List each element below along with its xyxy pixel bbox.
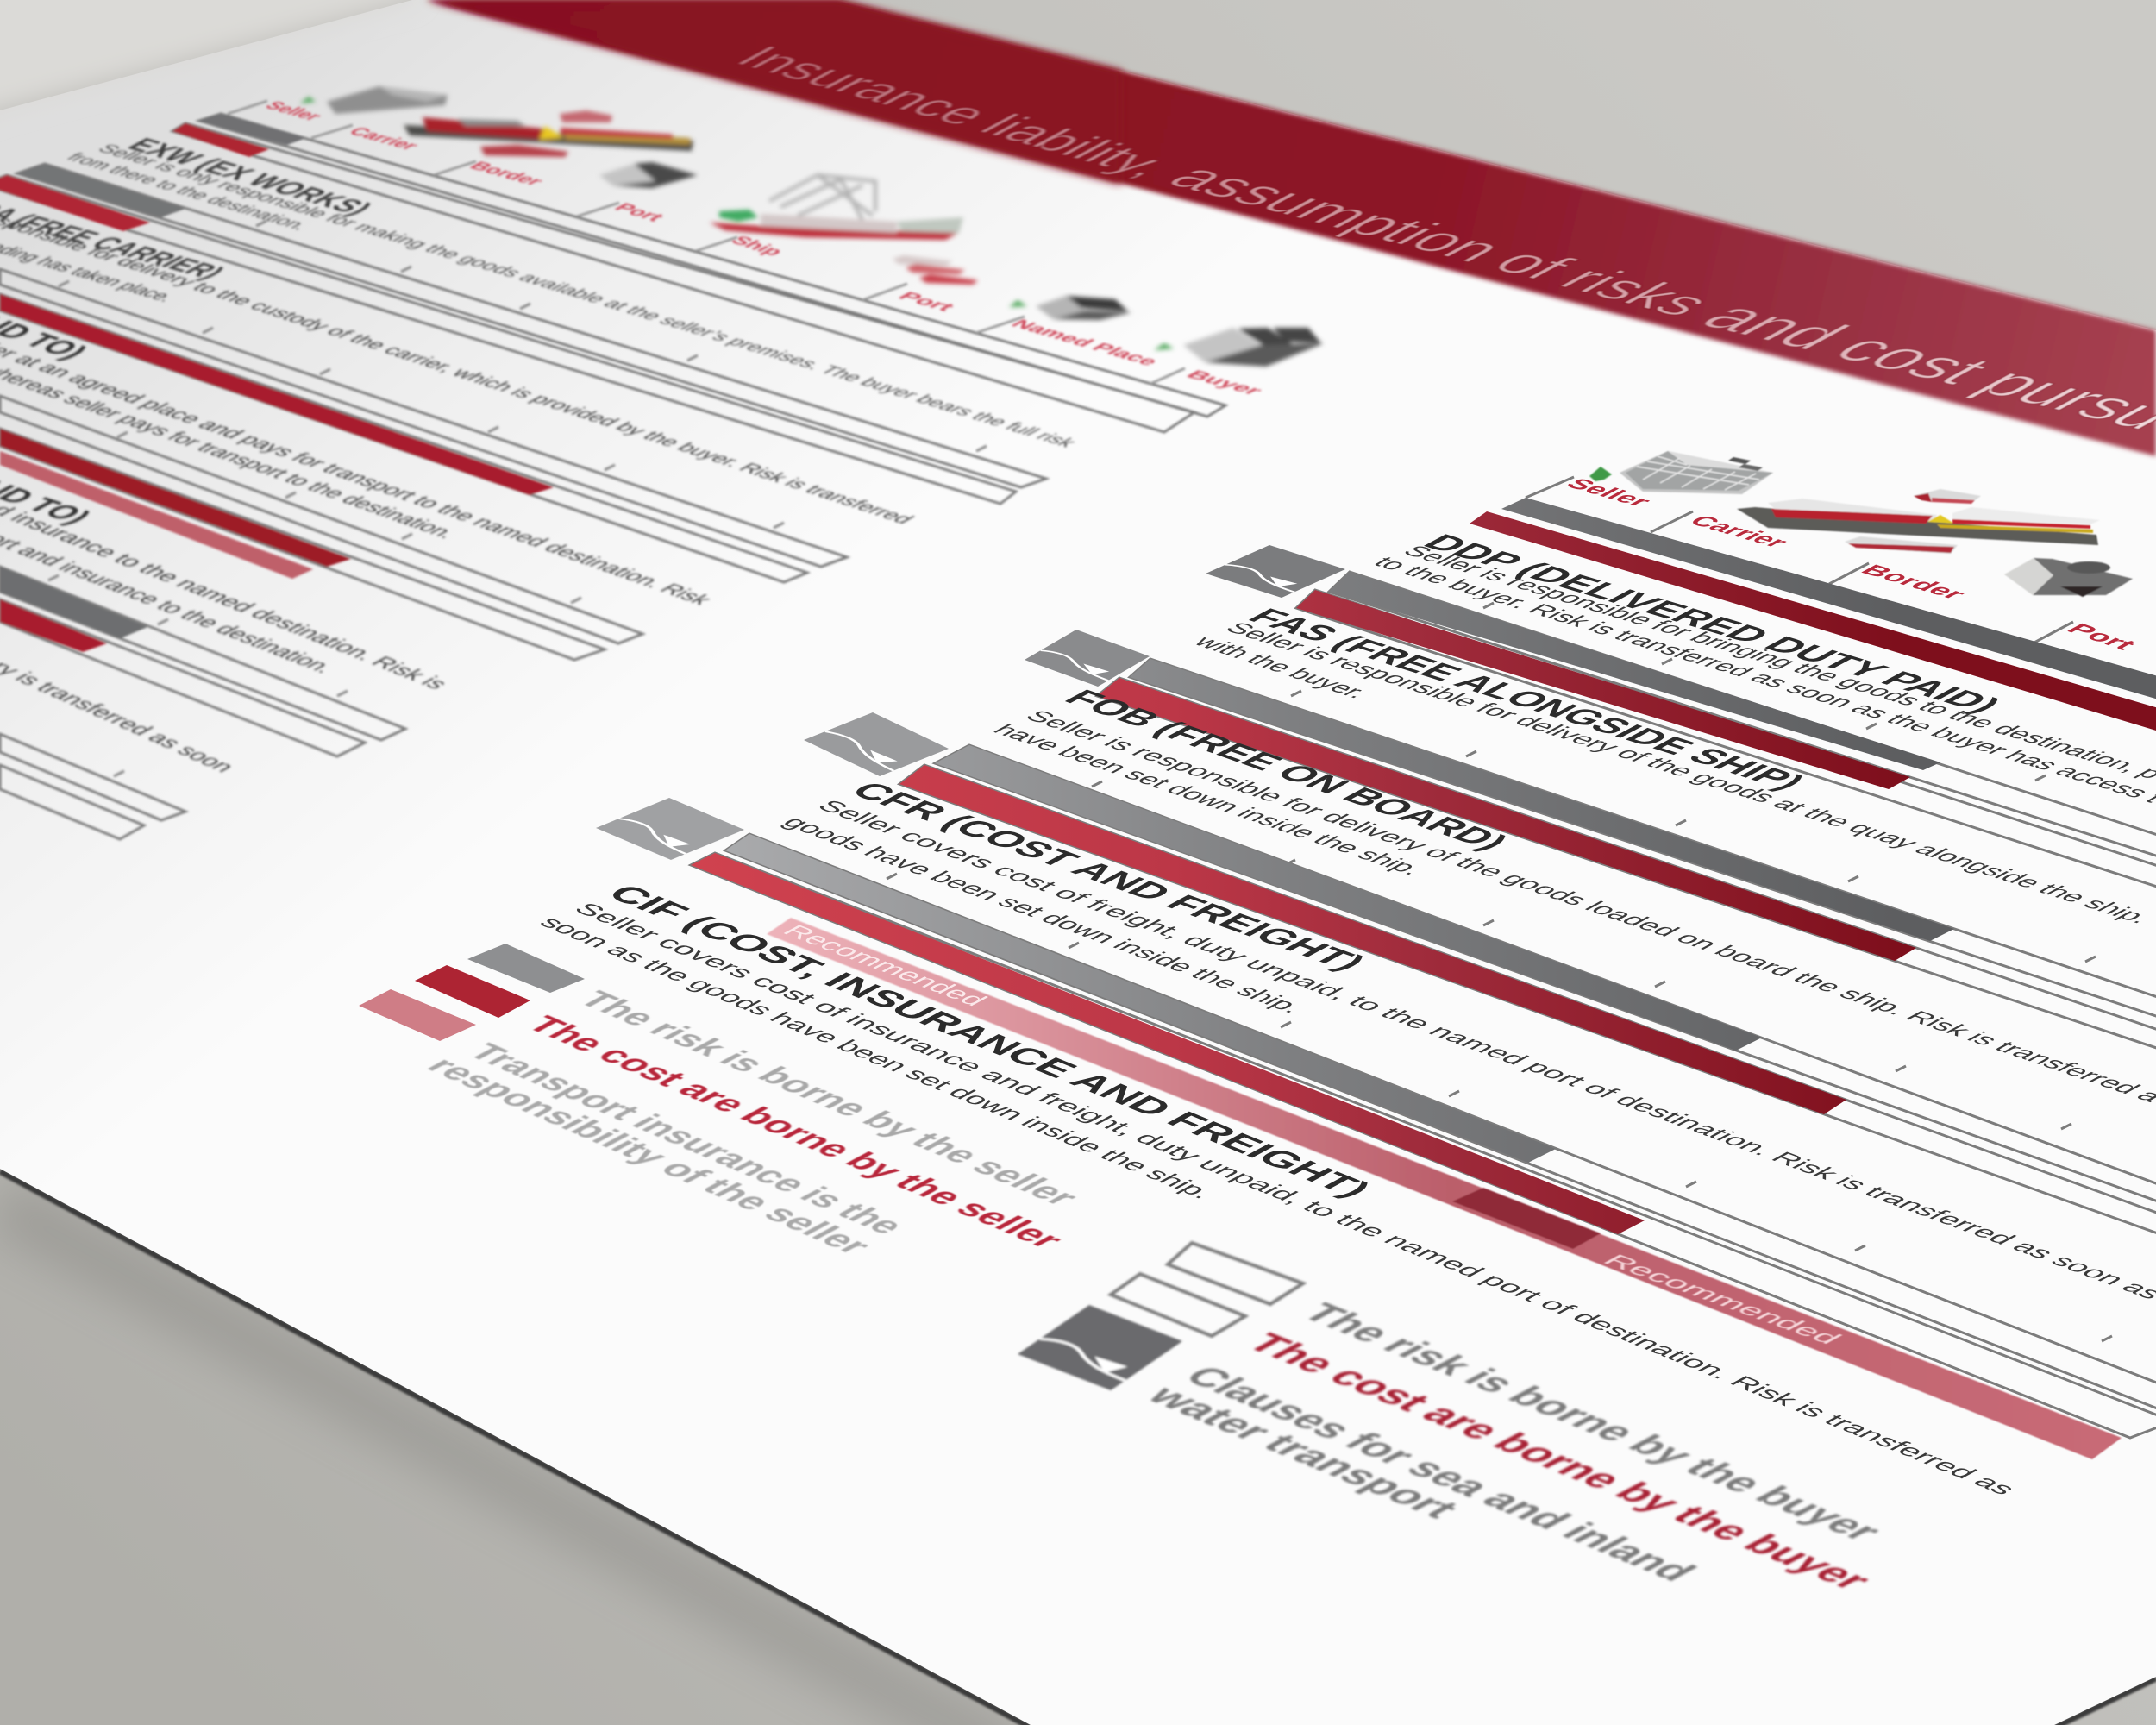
- swatch: insurance: [359, 989, 476, 1041]
- swatch: cost outline: [1111, 1274, 1245, 1336]
- icon: seller building: [1620, 451, 1773, 494]
- legend text: insurance: Transport insurance is the: [460, 1038, 914, 1239]
- label: border: Border: [1855, 561, 1973, 602]
- label: named place: Named Place: [1006, 317, 1164, 367]
- FOB text: have been set down inside the ship.: [987, 721, 1430, 878]
- panel: right stage icons: [1589, 451, 2133, 597]
- band shape: [426, 0, 2156, 456]
- stage labels, left table: [260, 99, 1269, 397]
- label: port: Port: [2061, 620, 2142, 653]
- FOB bars: [1097, 659, 1954, 961]
- DDP icon: sea transport: [1206, 545, 1345, 598]
- FAS bars: [1296, 572, 1940, 789]
- icon: lower truck: [480, 145, 568, 157]
- row outlines: [691, 572, 2156, 1438]
- label: seller: Seller: [1560, 475, 1658, 510]
- row tick marks: [887, 603, 2112, 1341]
- legend text: cost: The cost are borne by the seller: [518, 1011, 1073, 1252]
- legend: buyer: [1018, 1243, 1892, 1595]
- icon: green arrow: [1589, 467, 1612, 481]
- recommended insurance bar: [767, 918, 2122, 1459]
- icon: top truck: [560, 110, 612, 122]
- FOB title: FOB (FREE ON BOARD): [1056, 685, 1519, 855]
- stage divider ticks: [1526, 477, 2073, 644]
- icon: named place building: [1036, 296, 1132, 320]
- label: seller: Seller: [260, 99, 328, 122]
- header band: [426, 0, 2156, 456]
- DDP row: [1206, 498, 2156, 806]
- DDP title: DDP (DELIVERED DUTY PAID): [1414, 530, 2011, 717]
- swatch: cost: [415, 965, 530, 1018]
- legend text: insurance: responsibility of the seller: [418, 1052, 881, 1258]
- CPT bar: [0, 294, 554, 495]
- icon: sea transport clause: [1018, 1305, 1182, 1390]
- DDP text: to the buyer. Risk is transferred as soon as the buyer has access t: [1367, 554, 2156, 806]
- legend text: risk: The risk is borne by the seller: [570, 986, 1088, 1210]
- band far end, out of focus: [426, 0, 1121, 185]
- CIF bars: [691, 834, 1645, 1234]
- row tick marks: [48, 221, 987, 776]
- CFR icon: sea transport: [596, 798, 744, 860]
- title part 2: assumption of risks: [1152, 157, 1729, 323]
- swatch: risk: [467, 944, 585, 993]
- EXW text: from there to the destination.: [62, 150, 315, 232]
- icon: port building: [2004, 558, 2133, 597]
- FAS row: [1025, 572, 2156, 926]
- EXW title: EXW (EX WORKS): [120, 134, 381, 219]
- FCA bars: [0, 164, 185, 231]
- CFR text: Seller covers cost of freight, duty unpaid, to the named port of destination. Risk is transferred as soon as: [811, 797, 2156, 1302]
- label: ship: Ship: [726, 234, 789, 258]
- legend text: cost: The cost are borne by the buyer: [1236, 1328, 1882, 1595]
- paper soft shadow: [0, 1203, 1018, 1725]
- label: port: Port: [610, 201, 670, 223]
- CIF row: [533, 834, 2122, 1498]
- paper edge shadow: [0, 1171, 2156, 1725]
- CIF title: CIF (COST, INSURANCE AND FREIGHT): [599, 880, 1381, 1201]
- CFR row: [596, 745, 2156, 1302]
- FAS icon: sea transport: [1025, 630, 1150, 687]
- CIF text: soon as the goods have been set down inside the ship.: [533, 913, 1220, 1202]
- label: carrier: Carrier: [1683, 512, 1795, 550]
- label: border: Border: [465, 160, 549, 188]
- EXW text: Seller is only responsible for making the goods available at the seller’s premises. The buyer bears the full risk: [93, 141, 1082, 449]
- icon: crane: [769, 175, 875, 220]
- CIF text: [533, 900, 2021, 1498]
- fifth row bars: [0, 567, 147, 652]
- icon: port building: [599, 162, 698, 188]
- panel: left table (seller-side rules, out of focus): [0, 101, 1225, 839]
- legend text: clauses: Clauses for sea and inland: [1174, 1361, 1706, 1586]
- icon: container stacks: [893, 255, 978, 285]
- icon: buyer building: [1183, 328, 1324, 367]
- DDP text: Seller is responsible for bringing the goods to the destination, p: [1396, 543, 2156, 782]
- panel: left stage icons (out of focus): [300, 86, 1324, 367]
- row outlines: [0, 114, 1225, 839]
- FOB icon: sea transport: [804, 712, 949, 776]
- title part 1: Insurance liability,: [723, 40, 1186, 183]
- FOB text: Seller is responsible for delivery of the goods loaded on board the ship. Risk is transferred a: [1018, 707, 2156, 1106]
- EXW bars: [172, 114, 306, 157]
- recommended label left: Recommended: [776, 922, 993, 1009]
- CFR bars: [899, 745, 1846, 1114]
- icon: seller building: [327, 86, 448, 114]
- legend text: risk: The risk is borne by the buyer: [1291, 1298, 1892, 1546]
- DDP bars: [1470, 498, 2156, 736]
- FAS text: with the buyer.: [1187, 633, 1375, 701]
- CIP bars: [0, 429, 351, 579]
- FOB row: [804, 659, 2156, 1106]
- stage divider ticks: [228, 101, 1185, 384]
- icon: train: [404, 117, 693, 151]
- legend: seller: [359, 944, 1088, 1258]
- title: [723, 40, 2156, 437]
- icon: ship: [710, 210, 963, 240]
- CFR text: [776, 797, 2156, 1302]
- panel: right table (maritime rules): [533, 477, 2156, 1498]
- top-left background highlight: [0, 0, 431, 129]
- swatch: risk outline: [1168, 1243, 1303, 1304]
- recommended label right: Recommended: [1596, 1251, 1848, 1347]
- stage labels, right table: [1560, 475, 2142, 653]
- legend text: clauses: water transport: [1136, 1381, 1469, 1523]
- icon: lower truck: [1845, 536, 1958, 554]
- label: port 2: Port: [893, 290, 961, 314]
- CFR title: CFR (COST AND FREIGHT): [842, 777, 1376, 975]
- CFR text: goods have been set down inside the ship.: [776, 813, 1310, 1017]
- CIF text: Seller covers cost of insurance and freight, duty unpaid, to the named port of destination. Risk is transferred as: [567, 900, 2021, 1498]
- label: buyer: Buyer: [1181, 368, 1269, 397]
- icon: train: [1737, 499, 2100, 545]
- icon: top truck: [1914, 489, 1981, 504]
- FAS text: Seller is responsible for delivery of the goods at the quay alongside the ship.: [1219, 619, 2156, 926]
- label: carrier: Carrier: [344, 125, 424, 153]
- icon: green arrows: [300, 97, 1174, 350]
- FAS title: FAS (FREE ALONGSIDE SHIP): [1239, 604, 1815, 794]
